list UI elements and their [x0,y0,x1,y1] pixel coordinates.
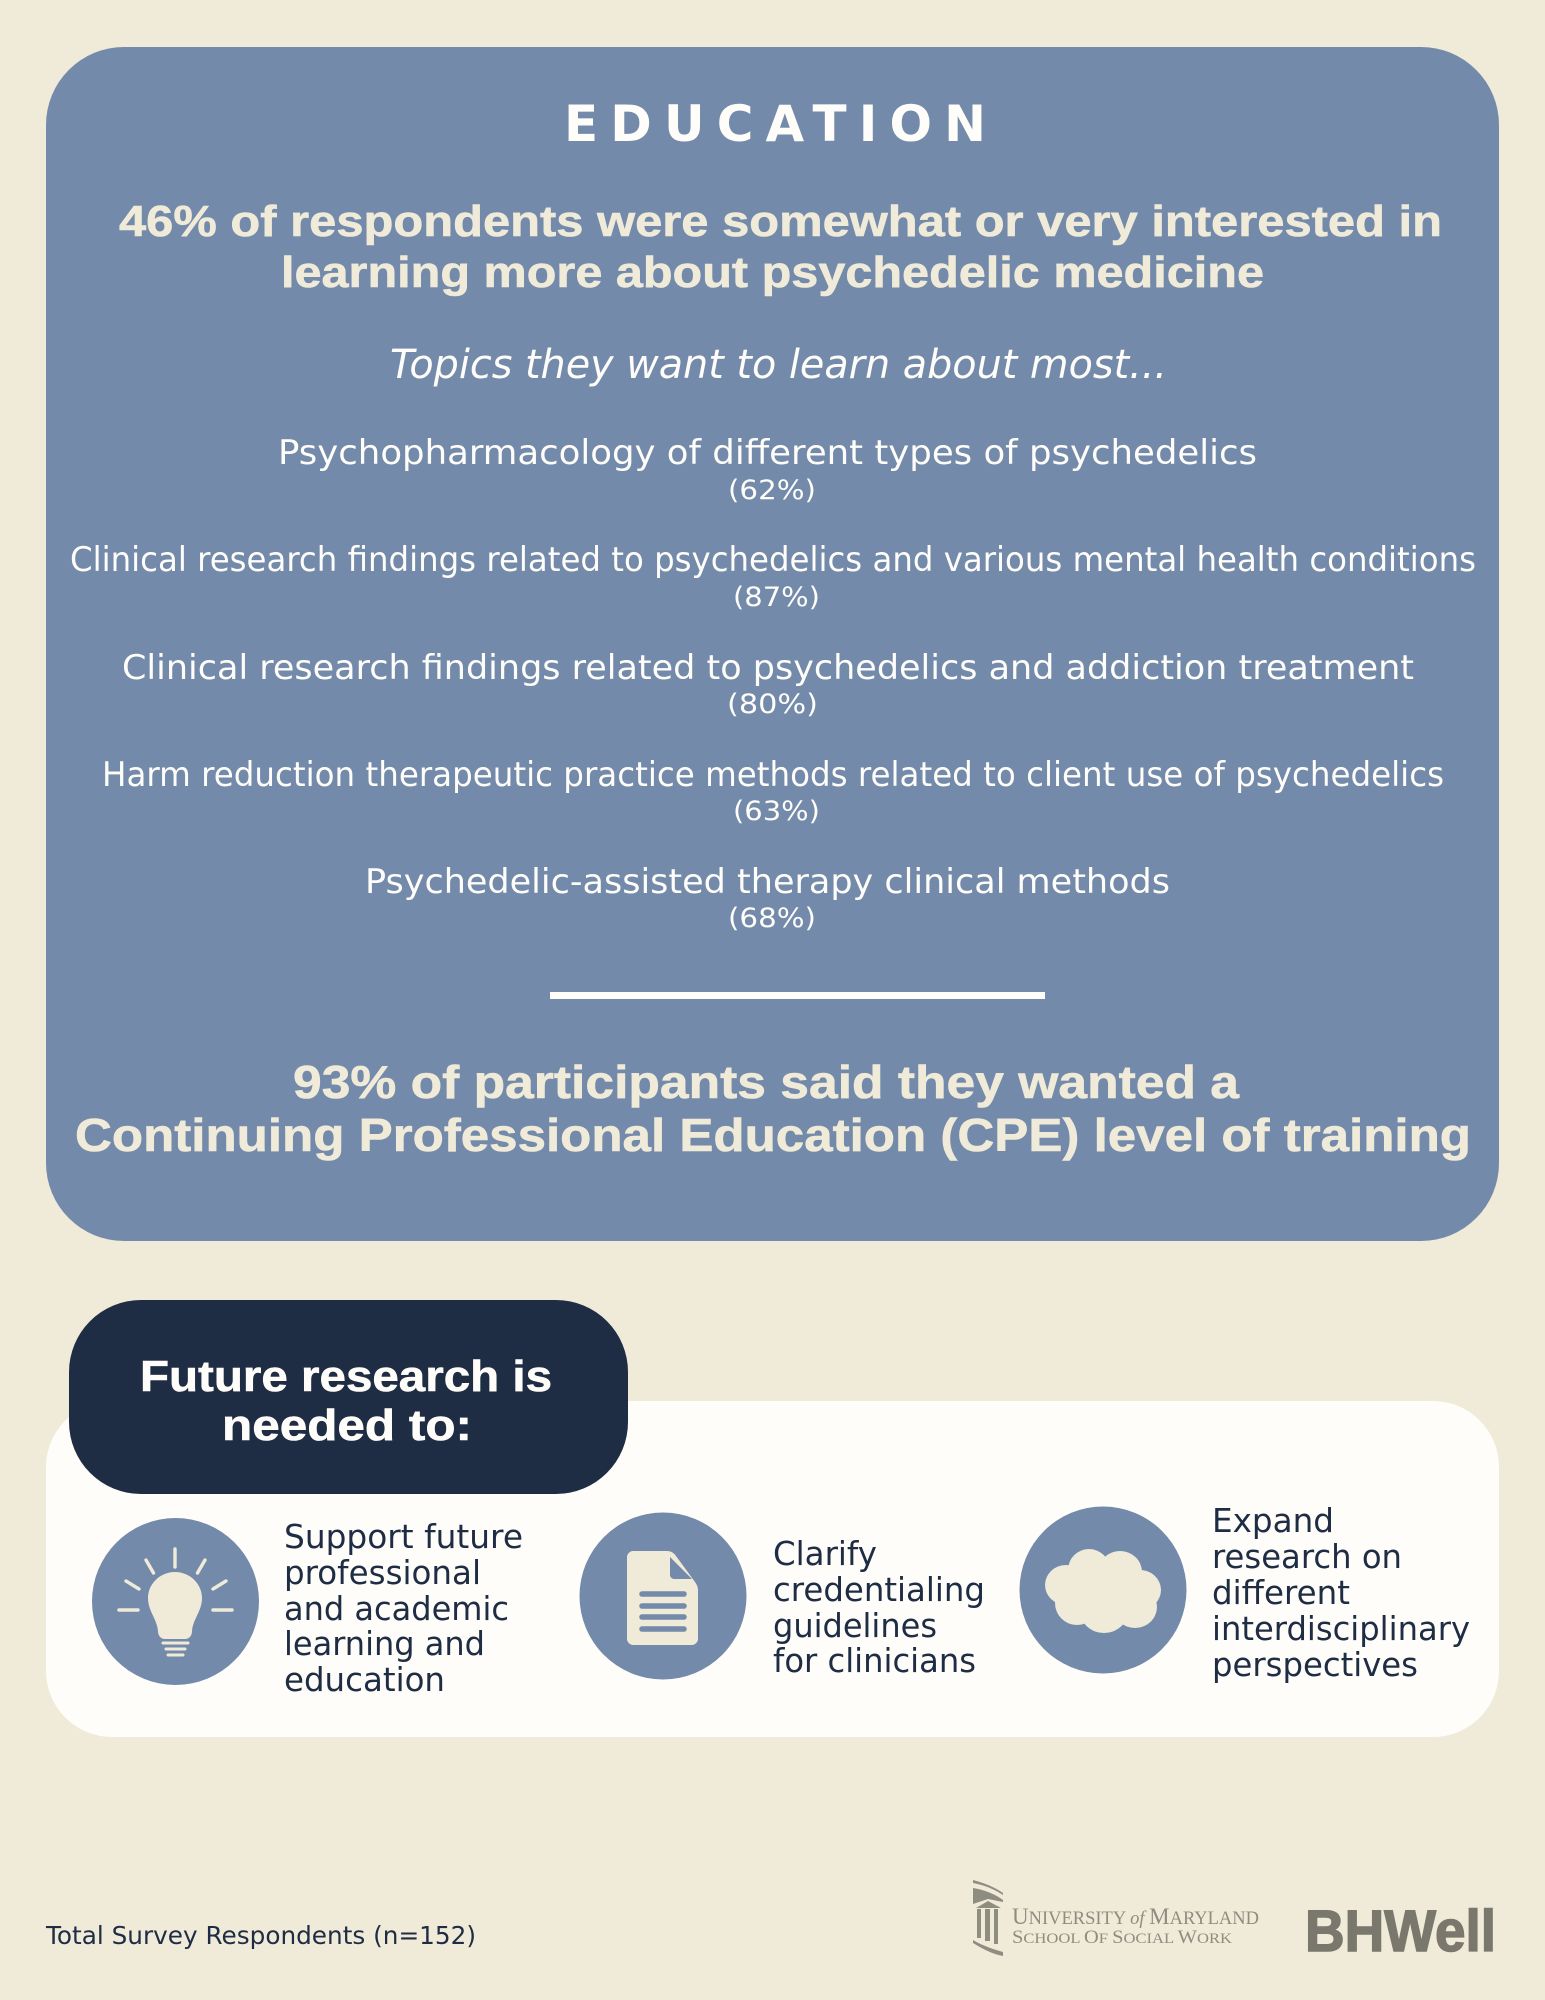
text: clarify: Clarify [773,1534,877,1573]
topic list: (68%) [728,903,816,934]
text: support: Support future [284,1517,523,1556]
icon: document [580,1512,746,1680]
text: expand: different [1212,1573,1350,1612]
text: clarify: credentialing [773,1570,985,1609]
text: expand: Expand [1212,1501,1334,1540]
icon: cloud [1020,1506,1186,1674]
topic list: Harm reduction therapeutic practice methods related to client use of psychedelics [102,755,1444,795]
title: EDUCATION [564,95,986,153]
icon: light bulb [92,1518,259,1685]
heading pill [69,1300,628,1494]
headline: interest in learning: 46% of respondents were somewhat or very interested in [119,197,1442,246]
text: clarify: guidelines [773,1606,937,1645]
heading pill: needed to: [222,1401,472,1450]
text: expand [1212,1501,1470,1684]
topic list: Clinical research findings related to psychedelics and addiction treatment [122,648,1414,688]
logo: BHWell: BHWell [1305,1899,1496,1964]
topic list: (87%) [733,582,820,613]
topic list: Psychedelic-assisted therapy clinical methods [365,862,1170,902]
text: clarify: for clinicians [773,1641,976,1680]
text: clarify [773,1534,985,1680]
text: support: and academic [284,1589,509,1628]
text: expand: perspectives [1212,1645,1418,1684]
topic list: Psychopharmacology of different types of psychedelics [278,433,1257,473]
text: support: learning and [284,1624,485,1663]
text: support [284,1517,523,1699]
panel: education [46,47,1499,1241]
topic list: (63%) [733,796,820,827]
topic list [70,433,1476,934]
headline: CPE training: 93% of participants said they wanted a [293,1056,1239,1108]
headline: CPE training: Continuing Professional Education (CPE) level of training [75,1109,1471,1161]
topic list: Clinical research findings related to psychedelics and various mental health conditions [70,540,1476,580]
logo: University of Maryland [973,1880,1259,1956]
headline: CPE training [75,1056,1471,1161]
topic list: (80%) [727,689,818,720]
text: expand: research on [1212,1537,1402,1576]
logo: University of Maryland: UNIVERSITY of MARYLAND [1012,1904,1259,1929]
headline: interest in learning [119,197,1442,297]
text: support: professional [284,1553,481,1592]
text: expand: interdisciplinary [1212,1609,1470,1648]
text: support: education [284,1660,445,1699]
heading pill: Future research is [140,1352,552,1401]
panel: future research [46,1300,1499,1737]
topic list: (62%) [728,475,816,506]
headline: interest in learning: learning more about psychedelic medicine [281,248,1264,297]
logo: University of Maryland: SCHOOL OF SOCIAL WORK [1012,1928,1232,1948]
footer note: Total Survey Respondents (n=152) [45,1921,476,1950]
subheading: Topics they want to learn about most... [390,342,1167,388]
